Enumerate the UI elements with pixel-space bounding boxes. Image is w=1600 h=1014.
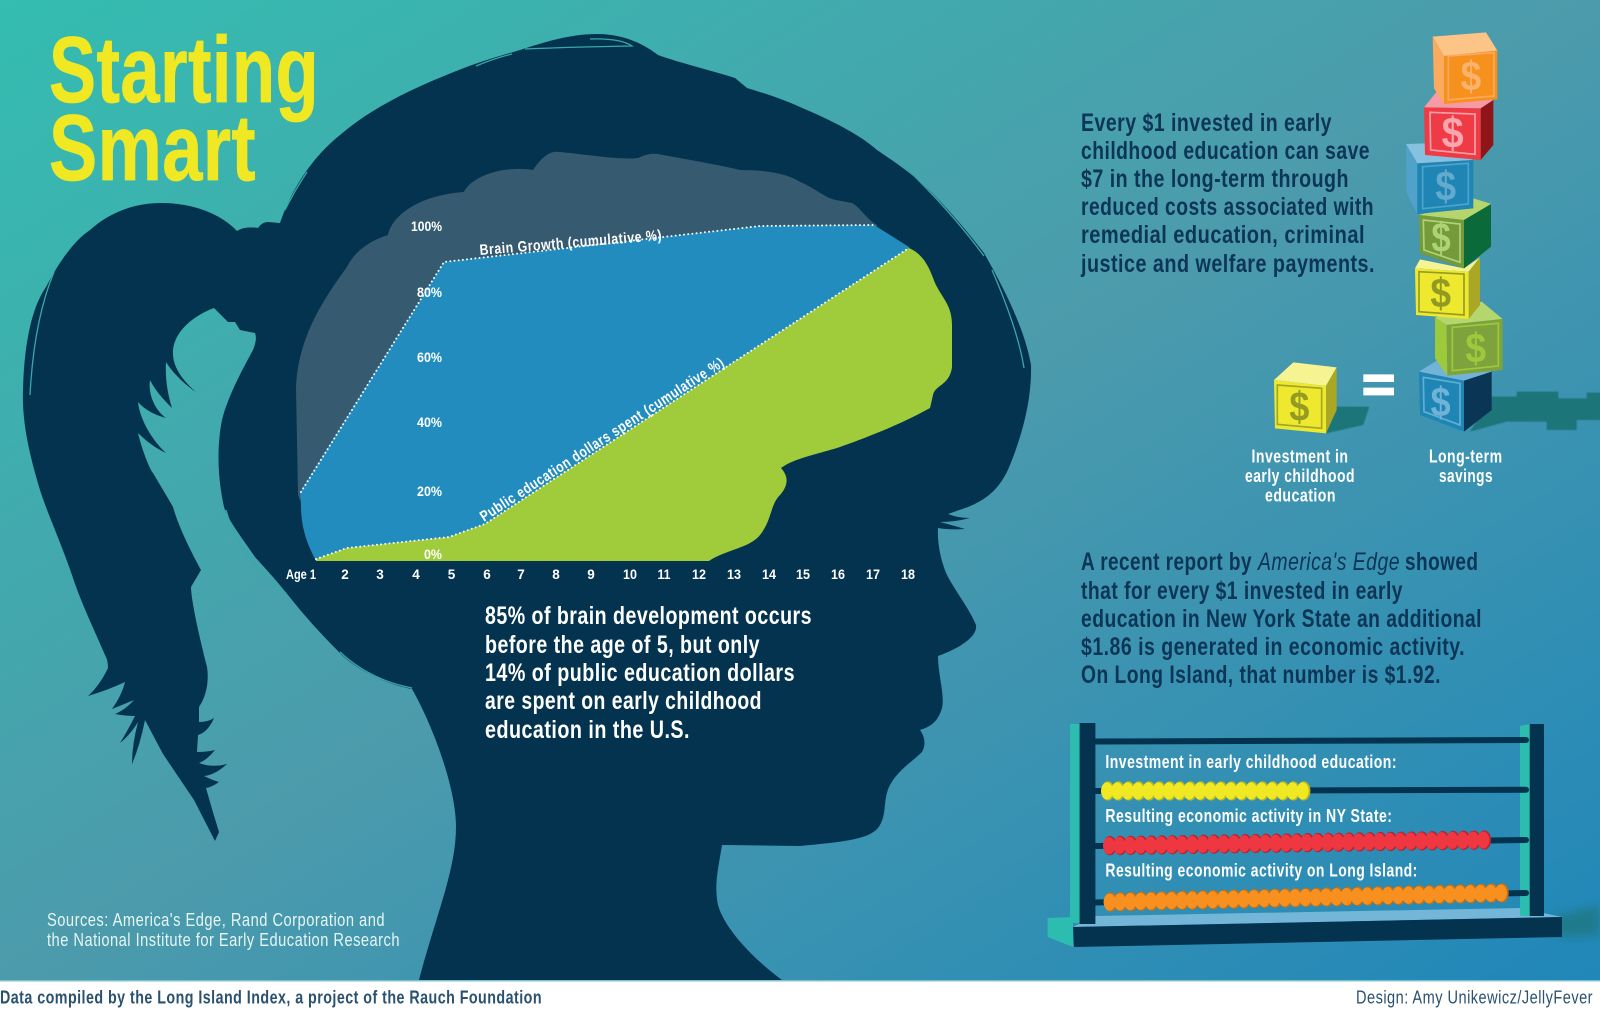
text: America's Edge report: On Long Island, that number is $1.92. <box>1081 661 1441 689</box>
block: blue <box>1406 143 1473 214</box>
text: brain development statistic: education in the U.S. <box>485 716 690 744</box>
x axis age labels: 6 <box>483 567 491 582</box>
caption: long-term savings <box>1429 446 1502 486</box>
x axis age labels: 3 <box>376 567 384 582</box>
x axis age labels: 8 <box>552 567 560 582</box>
title: Starting <box>49 17 319 122</box>
block: light green <box>1435 302 1503 376</box>
abacus chart <box>1048 723 1600 947</box>
abacus label: Long Island: Resulting economic activity on Long Island: <box>1105 861 1418 881</box>
text: sources: the National Institute for Early Education Research <box>47 929 400 950</box>
silhouette of child with ponytail <box>23 34 1031 980</box>
x axis age labels: 2 <box>341 567 349 582</box>
caption: investment in early childhood education: Investment in <box>1252 446 1348 466</box>
text: America's Edge report: that for every $1 invested in early <box>1081 577 1403 605</box>
caption: investment in early childhood education <box>1245 446 1355 506</box>
block: single yellow <box>1274 362 1337 433</box>
x axis age labels <box>286 567 915 582</box>
caption: investment in early childhood education: education <box>1265 486 1336 506</box>
x axis age labels: 7 <box>517 567 525 582</box>
block: red: $ <box>1442 110 1464 158</box>
abacus shadow <box>1545 905 1600 937</box>
text: brain development statistic: 14% of public education dollars <box>485 659 795 687</box>
text: brain development statistic: are spent on early childhood <box>485 687 762 715</box>
chart area: green public spending <box>316 248 952 561</box>
y axis labels: 0% <box>424 547 442 562</box>
x axis age labels: 4 <box>412 567 420 582</box>
abacus label: investment: Investment in early childhood education: <box>1105 752 1397 772</box>
block: yellow: $ <box>1430 270 1451 317</box>
block: bottom blue <box>1419 361 1492 432</box>
text: every $1 invested: Every $1 invested in early <box>1081 109 1332 137</box>
block: blue: $ <box>1435 162 1456 209</box>
chart area: grey brain backdrop <box>296 152 877 500</box>
text: every $1 invested: justice and welfare payments. <box>1080 250 1375 278</box>
text: sources <box>47 909 400 950</box>
abacus right post <box>1520 724 1544 916</box>
abacus rods <box>1095 740 1526 902</box>
y axis labels: 40% <box>417 415 442 430</box>
x axis age labels: 5 <box>448 567 456 582</box>
abacus label: NY State: Resulting economic activity in NY State: <box>1105 806 1392 826</box>
dotted line: public spending <box>316 248 909 559</box>
chart: brain growth vs public education spending <box>286 152 952 582</box>
text: every $1 invested: childhood education can save <box>1081 137 1370 165</box>
x axis age labels: 18 <box>901 567 915 582</box>
block: yellow <box>1415 257 1480 319</box>
text: America's Edge report: $1.86 is generated in economic activity. <box>1081 633 1465 661</box>
text: sources: Sources: America's Edge, Rand Corporation and <box>47 909 385 930</box>
x axis age labels: 11 <box>658 567 671 582</box>
line label: public education dollars: Public education dollars spent (cumulative %) <box>477 354 728 525</box>
block: single yellow: $ <box>1289 383 1309 430</box>
equals sign <box>1363 374 1394 395</box>
text: brain development statistic <box>485 602 812 744</box>
text: America's Edge report: education in New York State an additional <box>1081 605 1482 633</box>
y axis labels <box>411 219 442 562</box>
block: orange: $ <box>1461 53 1481 100</box>
block: orange <box>1433 32 1497 104</box>
x axis age labels: 14 <box>762 567 776 582</box>
title <box>49 17 319 200</box>
x axis age labels: 15 <box>796 567 810 582</box>
icon: stack of dollar blocks with equals sign <box>1274 32 1600 433</box>
y axis labels: 100% <box>411 219 442 234</box>
chart area: blue brain growth <box>300 225 910 561</box>
dotted line: brain growth <box>301 225 874 492</box>
text: America's Edge report: showed <box>1405 548 1478 576</box>
x axis age labels: 13 <box>727 567 741 582</box>
title: Smart <box>49 95 256 200</box>
block: bottom blue: $ <box>1431 379 1451 426</box>
text: every $1 invested: $7 in the long-term through <box>1081 165 1349 193</box>
text: America's Edge report: A recent report by <box>1081 548 1252 576</box>
caption: long-term savings: Long-term <box>1429 446 1502 466</box>
y axis labels: 20% <box>417 484 442 499</box>
caption: long-term savings: savings <box>1439 466 1493 486</box>
x axis age labels: 9 <box>587 567 595 582</box>
x axis age labels: 16 <box>831 567 845 582</box>
text: every $1 invested: remedial education, criminal <box>1081 221 1365 249</box>
text: every $1 invested <box>1080 109 1375 278</box>
abacus left post <box>1070 723 1095 924</box>
x axis age labels: 10 <box>623 567 637 582</box>
text: every $1 invested: reduced costs associated with <box>1081 193 1374 221</box>
y axis labels: 80% <box>417 285 442 300</box>
line label: brain growth: Brain Growth (cumulative %) <box>479 227 663 259</box>
footer credit: data: Data compiled by the Long Island Index, a project of the Rauch Foundation <box>0 986 542 1008</box>
block: dark green <box>1419 198 1492 268</box>
y axis labels: 60% <box>417 350 442 365</box>
block shadow: single block <box>1326 407 1369 433</box>
x axis age labels: 17 <box>866 567 880 582</box>
orange beads <box>1110 893 1506 902</box>
abacus base <box>1048 908 1562 947</box>
text: America's Edge report: America's Edge <box>1256 548 1400 576</box>
x axis age labels: 12 <box>692 567 706 582</box>
block shadow: tower <box>1470 392 1600 432</box>
x axis age labels: Age 1 <box>286 567 316 582</box>
footer band <box>0 980 1600 1014</box>
text: America's Edge report <box>1081 548 1482 689</box>
yellow beads <box>1107 784 1310 798</box>
block: light green: $ <box>1465 325 1486 372</box>
text: brain development statistic: before the age of 5, but only <box>485 631 760 659</box>
block: dark green: $ <box>1431 214 1451 261</box>
block: red <box>1424 92 1493 160</box>
red beads <box>1109 840 1487 846</box>
caption: investment in early childhood education: early childhood <box>1245 466 1355 486</box>
text: brain development statistic: 85% of brain development occurs <box>485 602 812 630</box>
